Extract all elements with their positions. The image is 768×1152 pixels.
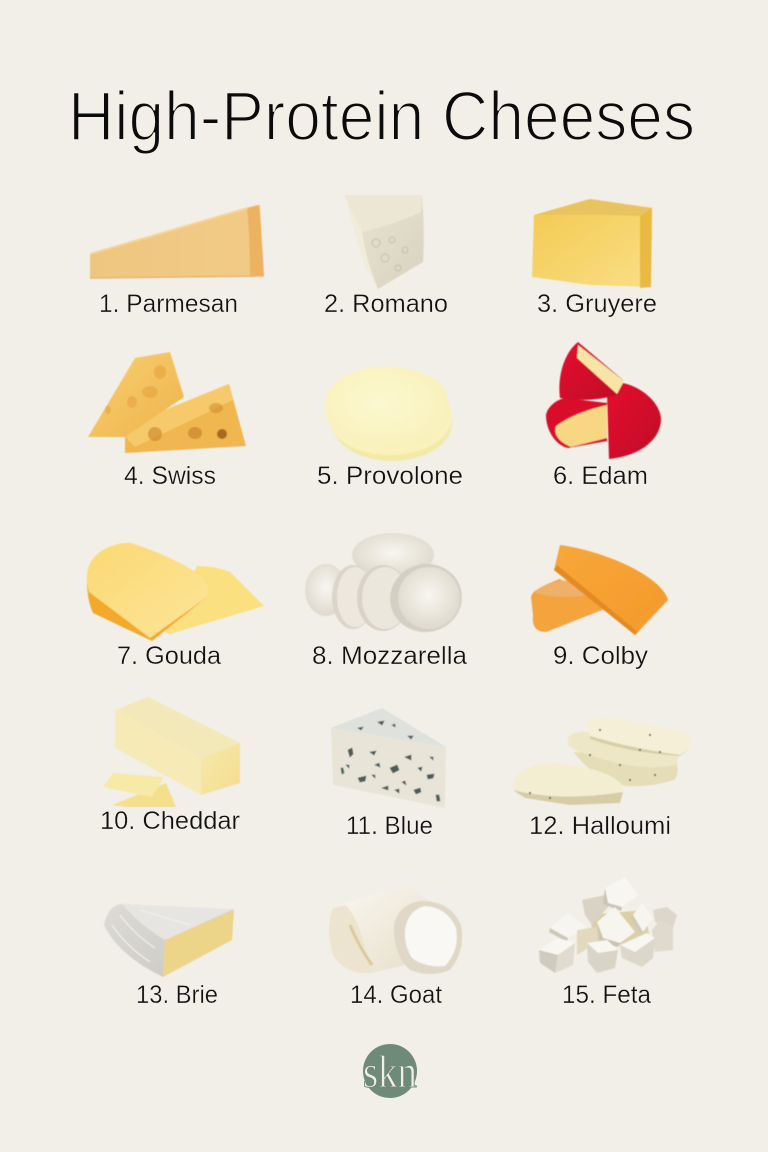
panel: 3. Gruyere: [532, 199, 657, 318]
panel: 12. Halloumi: [513, 718, 690, 840]
panel: 9. Colby: [531, 545, 668, 670]
panel: 15. Feta: [539, 877, 677, 1009]
logo: skn monogram: skn: [363, 1046, 417, 1097]
icon: edam red wax wheel: [546, 342, 661, 459]
panel: 13. Brie: [104, 904, 234, 1009]
panel: 6. Edam: [546, 342, 661, 490]
label: 1. Parmesan: [99, 290, 238, 318]
icon: colby wedges: [531, 545, 668, 635]
label: 15. Feta: [562, 981, 651, 1009]
icon: gruyere block: [532, 199, 652, 288]
label: 4. Swiss: [124, 462, 216, 490]
panel: 7. Gouda: [87, 543, 264, 670]
label: 10. Cheddar: [100, 807, 240, 835]
icon: goat cheese log: [329, 888, 462, 974]
icon: romano wedge: [345, 195, 424, 289]
panel: 11. Blue: [331, 708, 446, 840]
panel: 5. Provolone: [317, 367, 463, 490]
title: High-Protein Cheeses: [68, 77, 695, 155]
label: 11. Blue: [346, 812, 433, 840]
panel: 2. Romano: [324, 195, 448, 318]
panel: 1. Parmesan: [90, 205, 264, 318]
icon: feta cubes: [539, 877, 677, 973]
icon: halloumi slices: [513, 718, 690, 805]
icon: brie wedge: [104, 904, 234, 977]
label: 12. Halloumi: [529, 812, 671, 840]
panel: 4. Swiss: [88, 352, 246, 490]
label: 5. Provolone: [317, 462, 463, 490]
label: 13. Brie: [136, 981, 218, 1009]
icon: gouda wedges: [87, 543, 264, 641]
label: 9. Colby: [553, 642, 649, 670]
panel: 10. Cheddar: [100, 697, 240, 835]
label: 8. Mozzarella: [312, 642, 467, 670]
icon: swiss cheese wedges: [88, 352, 246, 453]
label: 2. Romano: [324, 290, 448, 318]
icon: mozzarella slices: [305, 533, 468, 639]
panel: 8. Mozzarella: [305, 533, 468, 670]
label: 3. Gruyere: [537, 290, 657, 318]
icon: blue cheese wedge: [331, 708, 446, 808]
label: 7. Gouda: [117, 642, 221, 670]
label: 14. Goat: [350, 981, 442, 1009]
icon: parmesan wedge: [90, 205, 264, 278]
icon: provolone slices: [325, 367, 452, 461]
icon: cheddar block and slices: [103, 697, 240, 807]
panel: 14. Goat: [329, 888, 462, 1009]
label: 6. Edam: [553, 462, 648, 490]
